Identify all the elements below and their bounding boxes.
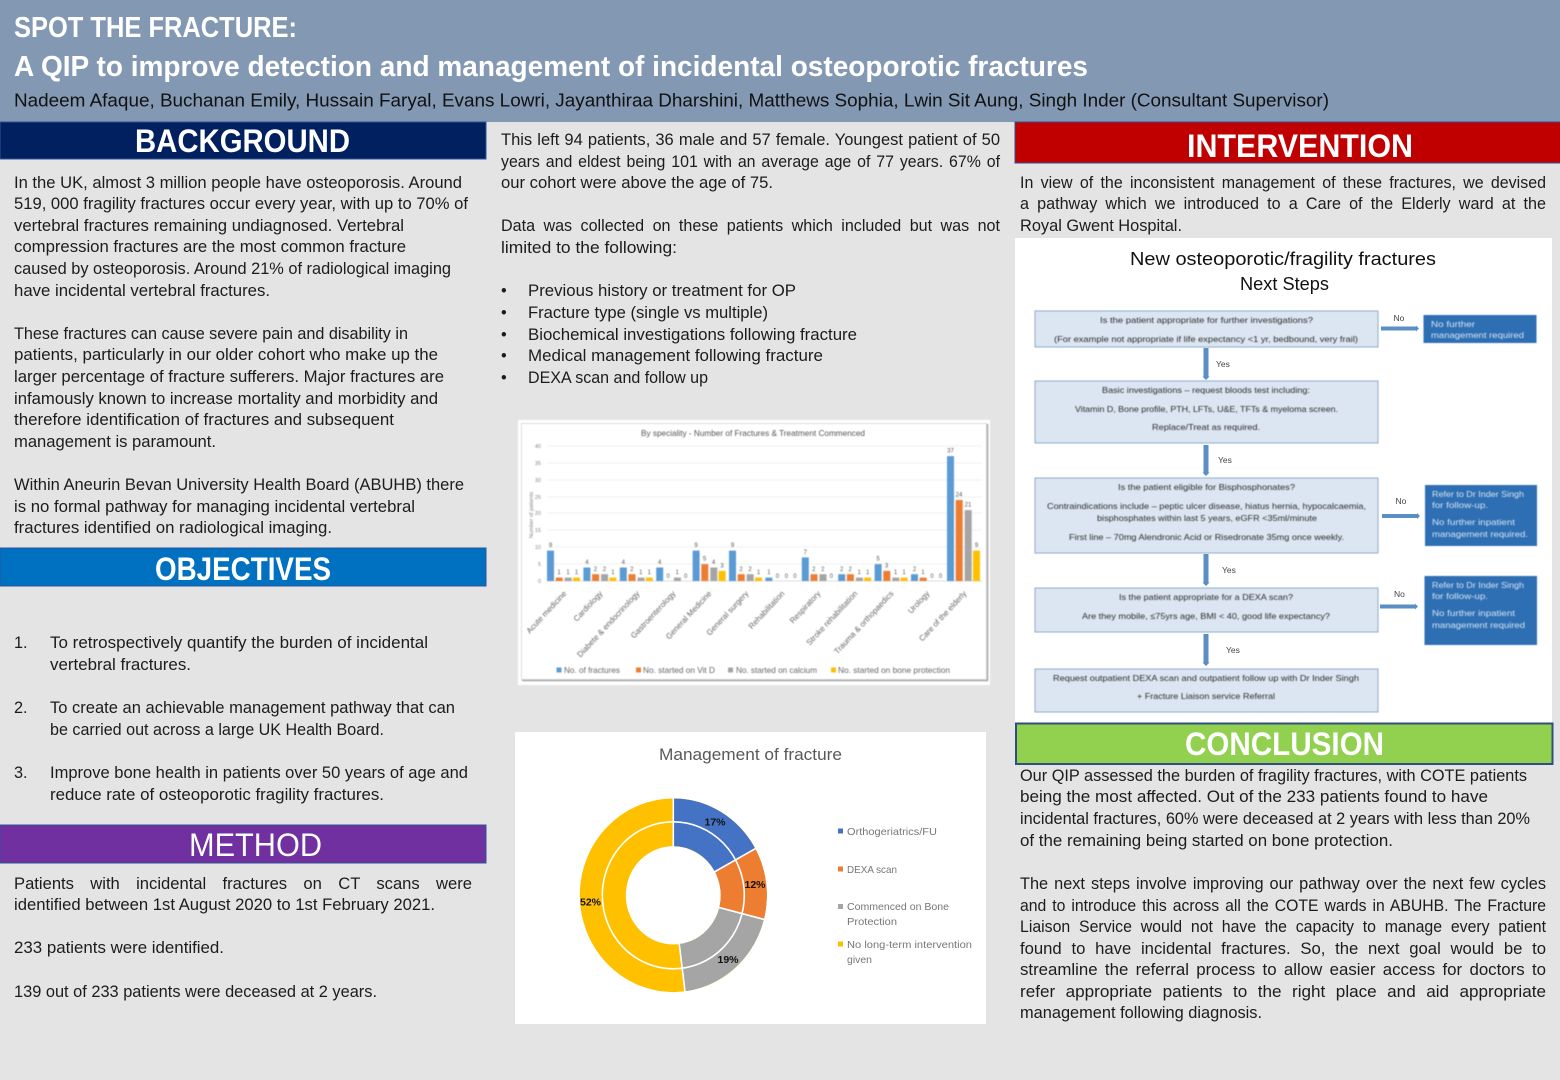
method text: Patients with incidental fractures on CT scans were xyxy=(14,875,472,893)
category axis labels: General Medicine xyxy=(664,589,714,641)
outcome box: refer after bisphosphonates: Refer to Dr Inder Singh xyxy=(1432,489,1524,499)
bar chart: fractures by speciality: 10 xyxy=(535,545,541,551)
conclusion text: management following diagnosis. xyxy=(1020,1004,1262,1022)
donut legend: Commenced on Bone xyxy=(847,901,949,913)
yes and no labels: No xyxy=(1394,313,1405,323)
bar chart: fractures by speciality: 25 xyxy=(535,495,541,501)
category axis labels: Gastroenterology xyxy=(629,589,677,640)
bars: general surgery xyxy=(729,543,762,581)
bars: acute medicine: 1 xyxy=(566,570,570,576)
flowchart: next steps pathway xyxy=(1015,238,1552,723)
heading: objectives: OBJECTIVES xyxy=(155,551,331,587)
flow box: basic investigations: Replace/Treat as required. xyxy=(1152,422,1260,432)
data collected bullet list: Biochemical investigations following fracture xyxy=(528,326,857,344)
bar chart: fractures by speciality: 35 xyxy=(535,461,541,467)
heading: conclusion xyxy=(1016,724,1552,764)
donut percentage labels: 52% xyxy=(580,896,602,908)
bars: respiratory xyxy=(802,550,834,581)
bars: gastroenterology xyxy=(656,560,688,581)
flow box: request DEXA: + Fracture Liaison service Referral xyxy=(1137,691,1275,701)
category axis labels xyxy=(525,589,968,659)
bar chart legend: No. of fractures xyxy=(564,665,620,675)
bars: urology xyxy=(911,567,943,581)
conclusion text: The next steps involve improving our pathway over the next few cycles xyxy=(1020,875,1546,893)
background text xyxy=(14,174,468,537)
method continued text: Data was collected on these patients which included but was not xyxy=(501,217,1000,235)
bars: trauma and orthopaedics xyxy=(875,556,908,581)
outcome box: no further management: management required xyxy=(1431,330,1524,340)
bar chart: fractures by speciality: 40 xyxy=(535,444,541,450)
arrows: no xyxy=(1380,326,1420,610)
donut percentage labels xyxy=(580,816,766,966)
bars: trauma and orthopaedics: 1 xyxy=(902,570,906,576)
category axis labels: Acute medicine xyxy=(525,589,569,635)
conclusion text: streamline the referral process to allow easier access for doctors to xyxy=(1020,961,1546,979)
bars: acute medicine: 1 xyxy=(557,570,561,576)
category axis labels: Urology xyxy=(906,589,931,616)
bars: urology: 1 xyxy=(921,570,925,576)
data collected bullet list: Medical management following fracture xyxy=(528,347,823,365)
donut legend: No long-term intervention xyxy=(847,939,972,951)
flow box: bisphosphonates: Contraindications include – peptic ulcer disease, hiatus hernia, hypocalcaemia, xyxy=(1047,501,1366,511)
background text: management is paramount. xyxy=(14,433,216,451)
header banner xyxy=(0,0,1560,122)
background text: infamously known to increase mortality and morbidity and xyxy=(14,390,438,408)
bar chart: fractures by speciality xyxy=(518,420,990,685)
outcome box: refer after DEXA xyxy=(1424,576,1537,645)
bars: gastroenterology: 1 xyxy=(676,570,680,576)
conclusion text: of the remaining being started on bone protection. xyxy=(1020,832,1393,850)
method continued text: years and eldest being 101 with an average age of 77 years. 67% of xyxy=(501,153,1000,171)
bars: general medicine: 9 xyxy=(694,543,698,549)
bars: diabetes and endocrinology: 1 xyxy=(639,570,643,576)
conclusion text: found to have incidental fractures. So, the next goal would be to xyxy=(1020,940,1546,958)
bar chart legend: No. started on Vit D xyxy=(643,665,715,675)
yes and no labels: Yes xyxy=(1222,565,1236,575)
flow box: bisphosphonates: bisphosphates within last 5 years, eGFR <35ml/minute xyxy=(1097,513,1317,523)
background text: larger percentage of fracture sufferers. Major fractures are xyxy=(14,368,444,386)
flowchart title: Next Steps xyxy=(1240,273,1329,294)
background text: caused by osteoporosis. Around 21% of radiological imaging xyxy=(14,260,451,278)
donut legend: Orthogeriatrics/FU xyxy=(847,826,937,838)
category axis labels: Rehabilitation xyxy=(747,589,786,631)
bars: trauma and orthopaedics: 1 xyxy=(894,570,898,576)
flowchart title xyxy=(1130,248,1436,294)
bar chart: fractures by speciality: 15 xyxy=(535,528,541,534)
bars: trauma and orthopaedics: 5 xyxy=(876,556,880,562)
bars: rehabilitation: 0 xyxy=(785,574,789,580)
bars: cardiology: 4 xyxy=(585,560,589,566)
bars: respiratory: 0 xyxy=(830,574,834,580)
bars: respiratory: 7 xyxy=(804,550,808,556)
bars: stroke rehabilitation: 2 xyxy=(840,567,844,573)
flow box: bisphosphonates: First line – 70mg Alendronic Acid or Risedronate 35mg once weekly. xyxy=(1069,532,1344,542)
flow box: DEXA scan question: Is the patient appropriate for a DEXA scan? xyxy=(1119,592,1293,602)
yes and no labels: Yes xyxy=(1216,359,1230,369)
outcome box: no further management xyxy=(1424,315,1536,343)
conclusion text: Liaison Service would not have the capacity to manage every patient xyxy=(1020,918,1546,936)
panel: objectives xyxy=(0,548,486,804)
title line two: A QIP to improve detection and management of incidental osteoporotic fractures xyxy=(14,51,1088,83)
objectives list: To create an achievable management pathway that can xyxy=(50,699,455,717)
bars: acute medicine: 1 xyxy=(575,570,579,576)
background text: fractures identified on radiological imaging. xyxy=(14,519,332,537)
flow box: bisphosphonates: Is the patient eligible for Bisphosphonates? xyxy=(1118,482,1295,492)
conclusion text: and to introduce this across all the COTE wards in ABUHB. The Fracture xyxy=(1020,897,1546,915)
bars: acute medicine: 9 xyxy=(549,543,553,549)
bars: acute medicine xyxy=(547,543,580,581)
method text: 233 patients were identified. xyxy=(14,939,224,957)
bars: rehabilitation: 1 xyxy=(767,570,771,576)
category axis labels: Care of the elderly xyxy=(917,589,968,643)
conclusion text xyxy=(1020,767,1546,1022)
bars: urology: 0 xyxy=(939,574,943,580)
background text: Within Aneurin Bevan University Health Board (ABUHB) there xyxy=(14,476,464,494)
method text xyxy=(14,875,472,1001)
bar chart: fractures by speciality: 0 xyxy=(538,579,541,585)
bar chart: fractures by speciality: By speciality - Number of Fractures & Treatment Commenced xyxy=(641,428,865,438)
outcome box: refer after DEXA: No further inpatient xyxy=(1432,608,1516,618)
method text: identified between 1st August 2020 to 1st February 2021. xyxy=(14,896,435,914)
conclusion text: refer appropriate patients to the right place and aid appropriate xyxy=(1020,983,1546,1001)
category axis labels: Diabete & endocrinology xyxy=(575,589,641,659)
bars: care of the elderly: 24 xyxy=(956,492,963,498)
bar chart legend: No. started on calcium xyxy=(736,665,817,675)
category axis labels: Stroke rehabilitation xyxy=(805,589,859,647)
heading: objectives xyxy=(0,548,486,587)
bars: diabetes and endocrinology xyxy=(620,560,653,581)
bars: urology: 0 xyxy=(930,574,934,580)
heading: background: BACKGROUND xyxy=(135,123,350,159)
category axis labels: General surgery xyxy=(705,589,750,637)
bars: general surgery: 9 xyxy=(731,543,735,549)
flow box: request DEXA xyxy=(1035,669,1378,712)
background text: In the UK, almost 3 million people have osteoporosis. Around xyxy=(14,174,462,192)
intervention text xyxy=(1020,174,1546,235)
bars: care of the elderly: 37 xyxy=(947,448,954,454)
flowchart title: New osteoporotic/fragility fractures xyxy=(1130,248,1436,269)
flow box: bisphosphonates xyxy=(1035,478,1378,553)
objectives list xyxy=(14,634,468,804)
heading: intervention: INTERVENTION xyxy=(1187,128,1413,164)
outcome box: refer after DEXA: Refer to Dr Inder Singh xyxy=(1432,580,1524,590)
bars: rehabilitation: 0 xyxy=(776,574,780,580)
bars: care of the elderly: 21 xyxy=(965,502,972,508)
flow box: further investigations: Is the patient appropriate for further investigations? xyxy=(1100,315,1313,325)
conclusion text: Our QIP assessed the burden of fragility fractures, with COTE patients xyxy=(1020,767,1527,785)
yes and no labels: Yes xyxy=(1218,455,1232,465)
bars: cardiology: 1 xyxy=(611,570,615,576)
objectives list: be carried out across a large UK Health Board. xyxy=(50,721,384,739)
panel: intervention xyxy=(1015,122,1560,235)
category axis labels: Trauma & orthopaedics xyxy=(832,589,895,656)
flow box: DEXA scan question xyxy=(1035,588,1378,632)
bars: stroke rehabilitation: 1 xyxy=(866,570,870,576)
bars: respiratory: 2 xyxy=(821,567,825,573)
bars: stroke rehabilitation xyxy=(838,567,871,581)
outcome box: refer after DEXA: for follow-up. xyxy=(1432,591,1488,601)
method text: 139 out of 233 patients were deceased at 2 years. xyxy=(14,983,377,1001)
objectives list: vertebral fractures. xyxy=(50,656,191,674)
donut rings xyxy=(602,797,765,993)
bars: cardiology xyxy=(583,560,616,581)
method continued text: This left 94 patients, 36 male and 57 female. Youngest patient of 50 xyxy=(501,131,1000,149)
donut percentage labels: 17% xyxy=(704,816,726,828)
bars: general medicine xyxy=(693,543,726,581)
background text: patients, particularly in our older cohort who make up the xyxy=(14,346,438,364)
bars: general medicine: 3 xyxy=(720,564,724,570)
data collected bullet list: • xyxy=(501,282,507,300)
background text: therefore identification of fractures and subsequent xyxy=(14,411,394,429)
outcome box: refer after bisphosphonates: for follow-up. xyxy=(1432,500,1488,510)
bars: general surgery: 2 xyxy=(739,567,743,573)
flow box: basic investigations xyxy=(1035,381,1378,443)
data collected bullet list: • xyxy=(501,369,507,387)
bars: cardiology: 2 xyxy=(594,567,598,573)
yes and no labels xyxy=(1216,313,1407,655)
bars: diabetes and endocrinology: 1 xyxy=(648,570,652,576)
bars: general medicine: 4 xyxy=(712,560,716,566)
bars: general surgery: 1 xyxy=(757,570,761,576)
bar chart: fractures by speciality: 20 xyxy=(535,511,541,517)
donut title: Management of fracture xyxy=(659,745,842,764)
donut legend: given xyxy=(847,954,872,966)
data collected bullet list: Fracture type (single vs multiple) xyxy=(528,304,768,322)
bars: gastroenterology: 0 xyxy=(667,574,671,580)
category axis labels: Respiratory xyxy=(788,589,822,625)
bars: care of the elderly xyxy=(947,448,980,581)
data collected bullet list: • xyxy=(501,347,507,365)
data collected bullet list xyxy=(501,282,857,387)
intervention text: In view of the inconsistent management of these fractures, we devised xyxy=(1020,174,1546,192)
background text: 519, 000 fragility fractures occur every year, with up to 70% of xyxy=(14,195,468,213)
method continued text: our cohort were above the age of 75. xyxy=(501,174,773,192)
data collected bullet list: • xyxy=(501,304,507,322)
background text: compression fractures are the most common fracture xyxy=(14,238,406,256)
method continued text: limited to the following: xyxy=(501,239,677,257)
panel: background xyxy=(0,122,486,537)
bar chart: fractures by speciality: 5 xyxy=(538,562,541,568)
flow box: request DEXA: Request outpatient DEXA scan and outpatient follow up with Dr Inder Singh xyxy=(1053,673,1359,683)
bar chart legend xyxy=(556,665,950,675)
bars: general medicine: 5 xyxy=(703,556,707,562)
bars: care of the elderly: 9 xyxy=(975,543,979,549)
bar chart legend: No. started on bone protection xyxy=(838,665,950,675)
flow box: further investigations: (For example not appropriate if life expectancy <1 yr, bedbound, very frail) xyxy=(1054,334,1358,344)
flow box: basic investigations: Vitamin D, Bone profile, PTH, LFTs, U&E, TFTs & myeloma screen. xyxy=(1075,404,1338,414)
background text: These fractures can cause severe pain and disability in xyxy=(14,325,408,343)
outcome box: refer after bisphosphonates: No further inpatient xyxy=(1432,517,1516,527)
title line one: SPOT THE FRACTURE: xyxy=(14,12,297,44)
method continued text xyxy=(501,131,1000,257)
yes and no labels: No xyxy=(1394,589,1405,599)
outcome box: refer after bisphosphonates xyxy=(1425,485,1537,546)
yes and no labels: No xyxy=(1396,496,1407,506)
bars: rehabilitation xyxy=(765,570,797,581)
objectives list: To retrospectively quantify the burden of incidental xyxy=(50,634,428,652)
heading: method xyxy=(0,825,486,863)
heading: background xyxy=(0,122,486,159)
outcome box: refer after DEXA: management required xyxy=(1432,620,1525,630)
donut chart: management of fracture xyxy=(515,732,986,1024)
background text: is no formal pathway for managing incidental vertebral xyxy=(14,498,415,516)
heading: intervention xyxy=(1015,122,1560,164)
flow box: further investigations xyxy=(1035,311,1378,347)
background text: vertebral fractures remaining undiagnosed. Vertebral xyxy=(14,217,404,235)
outcome box: no further management: No further xyxy=(1431,319,1475,329)
bars: respiratory: 2 xyxy=(812,567,816,573)
conclusion text: being the most affected. Out of the 233 patients found to have xyxy=(1020,788,1488,806)
donut percentage labels: 19% xyxy=(717,954,739,966)
bars: stroke rehabilitation: 1 xyxy=(858,570,862,576)
bars: trauma and orthopaedics: 3 xyxy=(885,564,889,570)
flow box: basic investigations: Basic investigations – request bloods test including: xyxy=(1102,385,1310,395)
donut legend: DEXA scan xyxy=(847,864,897,876)
donut legend: Protection xyxy=(847,916,897,928)
bars: general surgery: 2 xyxy=(748,567,752,573)
bars: diabetes and endocrinology: 4 xyxy=(622,560,626,566)
objectives list: 3. xyxy=(14,764,28,782)
yes and no labels: Yes xyxy=(1226,645,1240,655)
bar chart: fractures by speciality: Number of patients xyxy=(529,492,535,538)
data collected bullet list: DEXA scan and follow up xyxy=(528,369,708,387)
authors: Nadeem Afaque, Buchanan Emily, Hussain Faryal, Evans Lowri, Jayanthiraa Dharshini, Matthews Sophia, Lwin Sit Aung, Singh Inder (Consultant Supervisor) xyxy=(14,90,1329,110)
intervention text: Royal Gwent Hospital. xyxy=(1020,217,1182,235)
background text: have incidental vertebral fractures. xyxy=(14,282,270,300)
bars: rehabilitation: 0 xyxy=(793,574,797,580)
data collected bullet list: Previous history or treatment for OP xyxy=(528,282,796,300)
heading: method: METHOD xyxy=(189,827,322,863)
outcome box: refer after bisphosphonates: management required. xyxy=(1432,529,1528,539)
bars: gastroenterology: 4 xyxy=(658,560,662,566)
category axis labels: Cardiology xyxy=(572,589,604,623)
heading: conclusion: CONCLUSION xyxy=(1185,726,1384,762)
panel: method xyxy=(0,825,486,1001)
bars: cardiology: 2 xyxy=(603,567,607,573)
conclusion text: incidental fractures, 60% were deceased at 2 years with less than 20% xyxy=(1020,810,1530,828)
objectives list: 1. xyxy=(14,634,28,652)
bar chart: fractures by speciality: 30 xyxy=(535,478,541,484)
donut legend xyxy=(838,826,972,966)
flow box: DEXA scan question: Are they mobile, ≤75yrs age, BMI < 40, good life expectancy? xyxy=(1082,611,1330,621)
bars: gastroenterology: 0 xyxy=(684,574,688,580)
bars: diabetes and endocrinology: 2 xyxy=(630,567,634,573)
objectives list: 2. xyxy=(14,699,28,717)
bars: urology: 2 xyxy=(913,567,917,573)
donut percentage labels: 12% xyxy=(744,879,766,891)
intervention text: a pathway which we introduced to a Care of the Elderly ward at the xyxy=(1020,195,1546,213)
objectives list: Improve bone health in patients over 50 years of age and xyxy=(50,764,468,782)
panel: conclusion xyxy=(1016,724,1552,1022)
bars: stroke rehabilitation: 2 xyxy=(849,567,853,573)
objectives list: reduce rate of osteoporotic fragility fractures. xyxy=(50,786,384,804)
data collected bullet list: • xyxy=(501,326,507,344)
arrows: yes xyxy=(1202,348,1210,666)
